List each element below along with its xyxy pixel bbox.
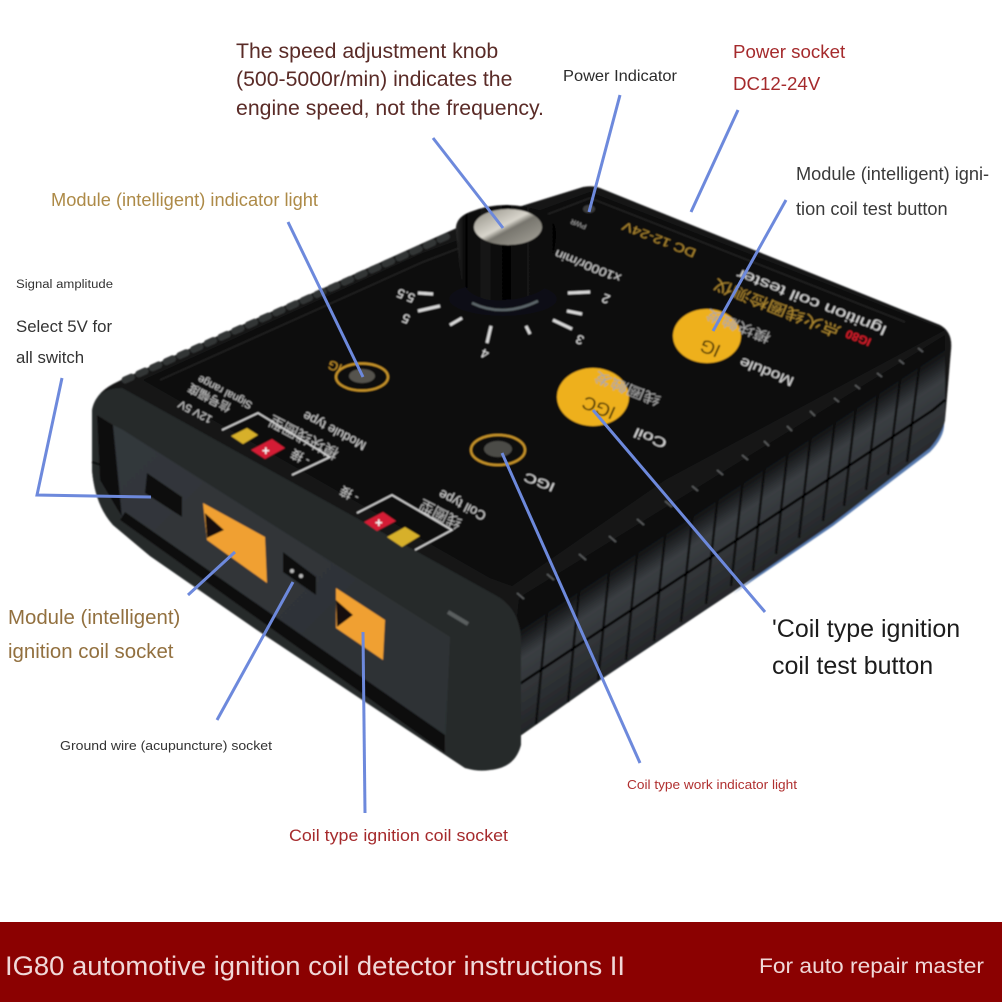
signal range print (176, 373, 254, 425)
arrow: power socket (691, 110, 738, 212)
arrow: knob (433, 138, 503, 228)
label: module test button: Module (intelligent) igni- (796, 164, 989, 184)
coil test button: IGC (579, 392, 619, 423)
label: coil test button: coil test button (772, 652, 933, 680)
coil type print (357, 487, 488, 550)
label: select 5V: all switch (16, 348, 84, 367)
front seam (92, 462, 104, 466)
module indicator light (325, 357, 388, 390)
signal switch (145, 473, 182, 517)
rib shading (500, 335, 945, 750)
printed title (552, 217, 890, 349)
label: module test button: tion coil test button (796, 199, 948, 219)
arrow: signal switch (37, 378, 151, 497)
scale numbers: 5 (399, 311, 412, 327)
label: coil test button: 'Coil type ignition (772, 615, 960, 643)
top face inset line (160, 198, 905, 380)
side seam (453, 400, 945, 709)
arrow: module indicator (288, 222, 363, 377)
lower recess shadow (120, 512, 445, 753)
power led (583, 205, 595, 213)
arrow: coil test button (593, 410, 765, 612)
label: speed adjustment knob: engine speed, not the frequency. (236, 96, 544, 120)
printed power label: PWR (570, 217, 588, 230)
module indicator light: IG (325, 357, 344, 376)
coil indicator light: IGC (521, 470, 557, 495)
label: ground socket: Ground wire (acupuncture) socket (60, 738, 272, 753)
label: coil socket: Coil type ignition coil socket (289, 827, 508, 845)
device silhouette (92, 186, 951, 769)
coil type print: Coil type (436, 487, 488, 524)
scale numbers: 3 (573, 332, 586, 348)
arrow: module test button (713, 200, 786, 331)
front recessed panel (113, 425, 450, 753)
printed voltage: DC 12-24V (619, 218, 698, 260)
label: coil indicator: Coil type work indicator light (627, 778, 798, 792)
module socket (203, 503, 267, 583)
left recess slit (97, 415, 122, 517)
printed speed unit: x1000r/min (552, 247, 623, 285)
top edge bumps (125, 235, 450, 380)
speed dial scale (394, 286, 612, 362)
label: power socket: DC12-24V (733, 73, 821, 94)
module type print: 模块线圈型 (267, 411, 342, 462)
module type print: + (262, 443, 270, 458)
label: speed adjustment knob: (500-5000r/min) indicates the (236, 67, 512, 91)
arrow: power indicator (589, 95, 620, 212)
coil type print: 线圈型 (417, 495, 465, 532)
coil type print: + (375, 515, 383, 530)
label: module socket: ignition coil socket (8, 641, 174, 663)
rib notches (517, 348, 923, 599)
arrow: ground socket (217, 582, 293, 720)
scale numbers: 5.5 (394, 286, 417, 306)
front housing (92, 388, 521, 771)
printed model name: IG80 (843, 327, 873, 349)
scale numbers: 2 (599, 291, 612, 307)
signal range print: 12V 5V (176, 397, 214, 425)
side ribs (500, 335, 945, 750)
scale numbers (394, 286, 612, 362)
label: power socket: Power socket (733, 41, 846, 62)
arrow: module socket (188, 552, 235, 595)
module type print (222, 408, 368, 506)
corner highlight (448, 612, 468, 624)
label: module socket: Module (intelligent) (8, 607, 180, 629)
banner title: IG80 automotive ignition coil detector instructions II (5, 951, 625, 981)
coil indicator light (471, 435, 557, 495)
top face (143, 192, 945, 586)
module test button: Module (736, 354, 796, 390)
banner (0, 922, 1002, 1002)
label: module indicator light: Module (intelligent) indicator light (51, 190, 318, 210)
module test button: 模块触发 (703, 306, 773, 346)
label: speed adjustment knob: The speed adjustment knob (236, 39, 498, 63)
printed English title: Ignition coil tester (734, 265, 890, 338)
arrow: coil socket (363, 632, 365, 813)
speed adjustment knob (449, 205, 557, 316)
scale ticks (418, 292, 590, 343)
label: power indicator: Power Indicator (563, 68, 678, 85)
scale numbers: 4 (478, 346, 491, 362)
signal range print: Signal range (196, 373, 254, 411)
printed Chinese name: 点火线圈检测仪 (711, 275, 844, 340)
module test button (673, 306, 796, 390)
module type print: - 接 (337, 483, 361, 506)
coil socket (336, 588, 385, 660)
coil test button (557, 368, 669, 452)
ground socket (283, 552, 316, 595)
label: signal amplitude: Signal amplitude (16, 279, 113, 291)
device: IG80 ignition coil tester (92, 186, 951, 771)
label: select 5V: Select 5V for (16, 317, 112, 336)
module test button: IG (696, 335, 724, 361)
coil test button: Coil (631, 425, 669, 452)
module type print: Module type (301, 408, 368, 453)
arrow: coil indicator (502, 453, 640, 763)
module type print: - 接 (288, 446, 312, 469)
rib grooves (506, 353, 921, 746)
callout lines (37, 95, 786, 813)
banner tagline: For auto repair master (759, 954, 984, 978)
coil test button: 线圈触发 (592, 369, 663, 409)
blue floor reflection (733, 416, 944, 594)
signal range print: 信号幅度 (185, 381, 233, 415)
